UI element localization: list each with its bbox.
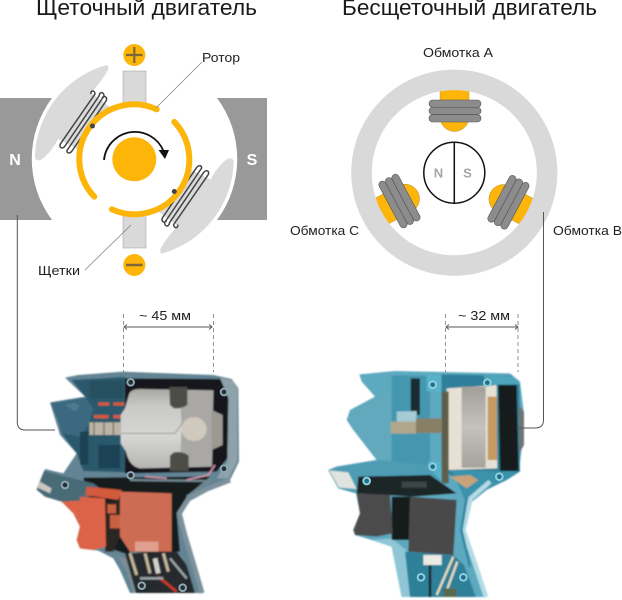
label: winding B: Обмотка В — [553, 223, 622, 238]
diagram: brushless motor — [290, 45, 622, 266]
photo: brushless drill cutaway — [328, 371, 524, 597]
terminal minus — [123, 254, 145, 276]
label: brushes: Щетки — [38, 263, 80, 278]
magnet N — [0, 98, 52, 220]
permanent magnet rotor: S — [463, 166, 472, 180]
magnet S — [217, 98, 267, 220]
winding A — [429, 88, 481, 131]
brushes — [123, 71, 146, 248]
dimension: 45 mm: ~ 45 мм — [139, 308, 191, 323]
rotor core — [112, 137, 156, 181]
label: rotor: Ротор — [202, 50, 240, 65]
photo: brushed drill cutaway — [37, 372, 239, 593]
magnet N: N — [9, 152, 21, 169]
diagram: brushed motor — [0, 44, 267, 278]
rotation arrow — [104, 132, 169, 160]
stator ring — [362, 80, 547, 266]
magnet S: S — [247, 152, 258, 169]
label: brushes — [38, 225, 131, 278]
dimension: 45 mm — [124, 308, 214, 372]
connector line left — [17, 215, 55, 430]
label: rotor — [156, 50, 240, 108]
connector line right — [517, 212, 544, 428]
terminal plus — [123, 44, 145, 66]
rotor ring — [79, 104, 189, 214]
stator pole lower right — [155, 158, 234, 253]
winding C — [367, 168, 430, 235]
permanent magnet rotor: N — [434, 166, 443, 180]
stator pole upper left — [35, 65, 114, 160]
permanent magnet rotor — [424, 142, 485, 203]
winding B — [478, 170, 541, 236]
dimension: 32 mm: ~ 32 мм — [458, 308, 510, 323]
dimension: 32 mm — [446, 308, 518, 372]
commutator interior — [81, 106, 187, 212]
label: winding C: Обмотка С — [290, 223, 359, 238]
label: winding A: Обмотка А — [423, 45, 493, 60]
contact dots — [90, 124, 177, 194]
